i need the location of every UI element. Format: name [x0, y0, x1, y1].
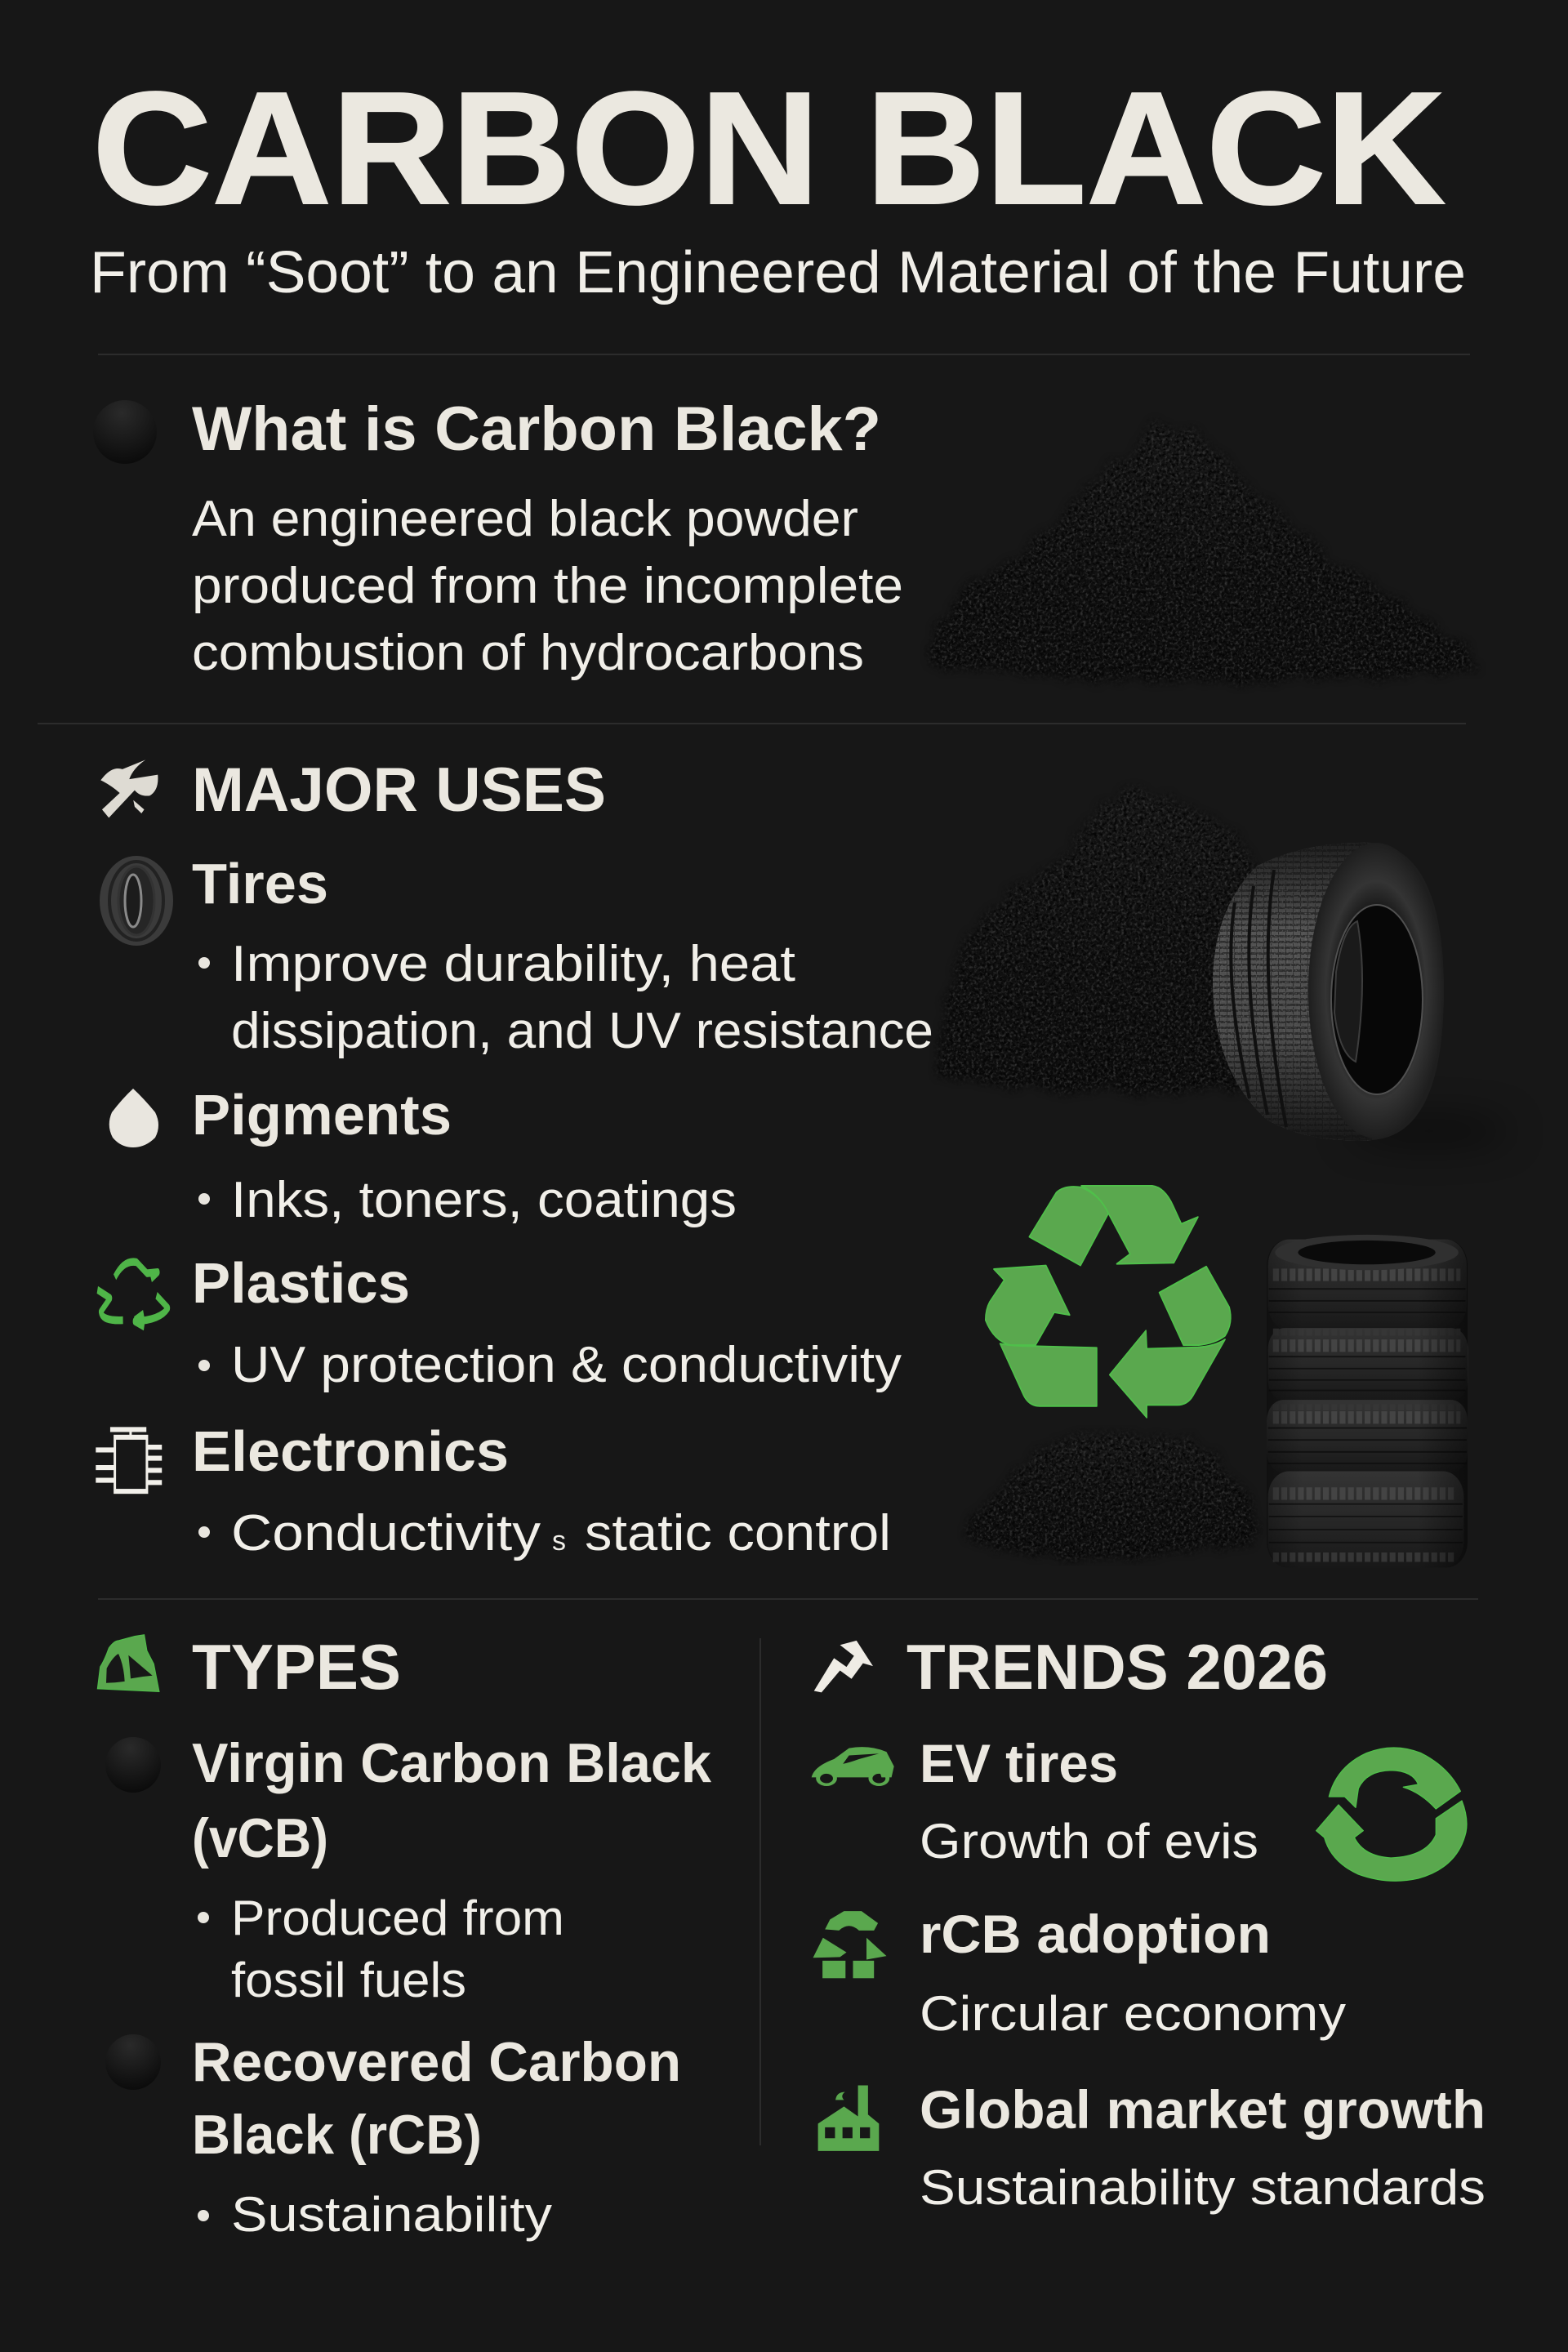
- item: pigments: [109, 1083, 737, 1228]
- subtitle: From “Soot” to an Engineered Material of the Future: [90, 240, 1466, 305]
- icon: factory: [818, 2086, 879, 2151]
- icon: carbon sphere: [93, 400, 157, 464]
- definition text: An engineered black powder: [192, 491, 858, 547]
- icon: crossed hammer and wrench: [100, 760, 158, 817]
- text: growth of evis: Growth of evis: [920, 1814, 1258, 1869]
- heading: trends 2026: TRENDS 2026: [906, 1631, 1328, 1703]
- icon: car: [812, 1747, 894, 1784]
- item: rCB adoption: [813, 1904, 1346, 2041]
- icon: green powder mound: [97, 1635, 159, 1691]
- icon: large recycling symbol: [986, 1186, 1231, 1418]
- heading line: vCB: (vCB): [192, 1807, 328, 1869]
- heading: recovered carbon black: Recovered Carbon: [192, 2031, 681, 2093]
- definition text: produced from the incomplete: [192, 558, 903, 614]
- item: plastics: [97, 1251, 902, 1393]
- heading: types: TYPES: [192, 1631, 401, 1703]
- bullet text: electronics: [198, 1505, 891, 1561]
- item: virgin carbon black: [105, 1732, 711, 2007]
- image: low powder pile: [962, 1435, 1257, 1556]
- bullet text: electronics: s: [552, 1526, 566, 1557]
- bullet text: tires: dissipation, and UV resistance: [231, 1003, 933, 1059]
- panel: what is carbon black: [93, 394, 1482, 682]
- bullet text: vCB: [198, 1891, 564, 2007]
- heading: pigments: Pigments: [192, 1083, 452, 1147]
- definition text: [192, 491, 903, 681]
- bullet text: tires: [198, 936, 933, 1059]
- icon: circular arrows: [1316, 1748, 1467, 1881]
- item: EV tires: [812, 1733, 1258, 1869]
- heading: tires: Tires: [192, 852, 328, 915]
- item: global market growth: [818, 2079, 1486, 2215]
- text: sustainability standards: Sustainability standards: [920, 2160, 1486, 2215]
- bullet text: vCB: Produced from: [231, 1891, 564, 1945]
- panel: types: [97, 1631, 711, 2242]
- icon: microchip: [96, 1429, 162, 1491]
- image: car tire: [1213, 843, 1511, 1143]
- heading: plastics: Plastics: [192, 1251, 410, 1315]
- heading: major uses: MAJOR USES: [192, 755, 606, 825]
- bullet text: vCB: fossil fuels: [231, 1953, 466, 2007]
- bullet text: rCB: Sustainability: [231, 2187, 552, 2242]
- heading: virgin carbon black: Virgin Carbon Black: [192, 1732, 711, 1794]
- panel: major uses: [96, 755, 933, 1561]
- icon: sphere: [105, 1737, 161, 1793]
- heading: electronics: Electronics: [192, 1419, 509, 1483]
- title: CARBON BLACK: [92, 59, 1446, 238]
- icon: drop: [109, 1089, 158, 1147]
- image: carbon black powder pile: [930, 425, 1482, 682]
- item: tires: [100, 852, 933, 1059]
- bullet text: tires: Improve durability, heat: [231, 936, 795, 992]
- heading: EV tires: EV tires: [920, 1733, 1118, 1793]
- item: electronics: [96, 1419, 891, 1561]
- item: recovered carbon black: [105, 2031, 681, 2242]
- bullet text: plastics: UV protection & conductivity: [231, 1337, 902, 1393]
- icon: trend arrow: [814, 1641, 873, 1692]
- icon: sphere: [105, 2034, 161, 2090]
- tire shadow: [1348, 1120, 1511, 1143]
- icon: tire: [100, 856, 173, 946]
- bullet text: pigments: Inks, toners, coatings: [231, 1172, 737, 1228]
- heading: global market growth: Global market growth: [920, 2079, 1486, 2140]
- bullet text: electronics: static control: [585, 1505, 891, 1561]
- icon: small recycle arrows: [97, 1262, 168, 1327]
- text: circular economy: Circular economy: [920, 1986, 1346, 2041]
- icon: green recycle mark: [813, 1911, 887, 1978]
- image: stack of tires: [1267, 1235, 1468, 1567]
- heading: rCB adoption: rCB adoption: [920, 1904, 1271, 1964]
- heading line: rCB: Black (rCB): [192, 2104, 482, 2166]
- image: powder pile behind tire: [939, 790, 1307, 1092]
- bullet text: electronics: Conductivity: [231, 1505, 541, 1561]
- panel: trends 2026: [812, 1631, 1486, 2215]
- heading: what is carbon black: What is Carbon Black?: [192, 394, 881, 464]
- definition text: combustion of hydrocarbons: [192, 625, 864, 681]
